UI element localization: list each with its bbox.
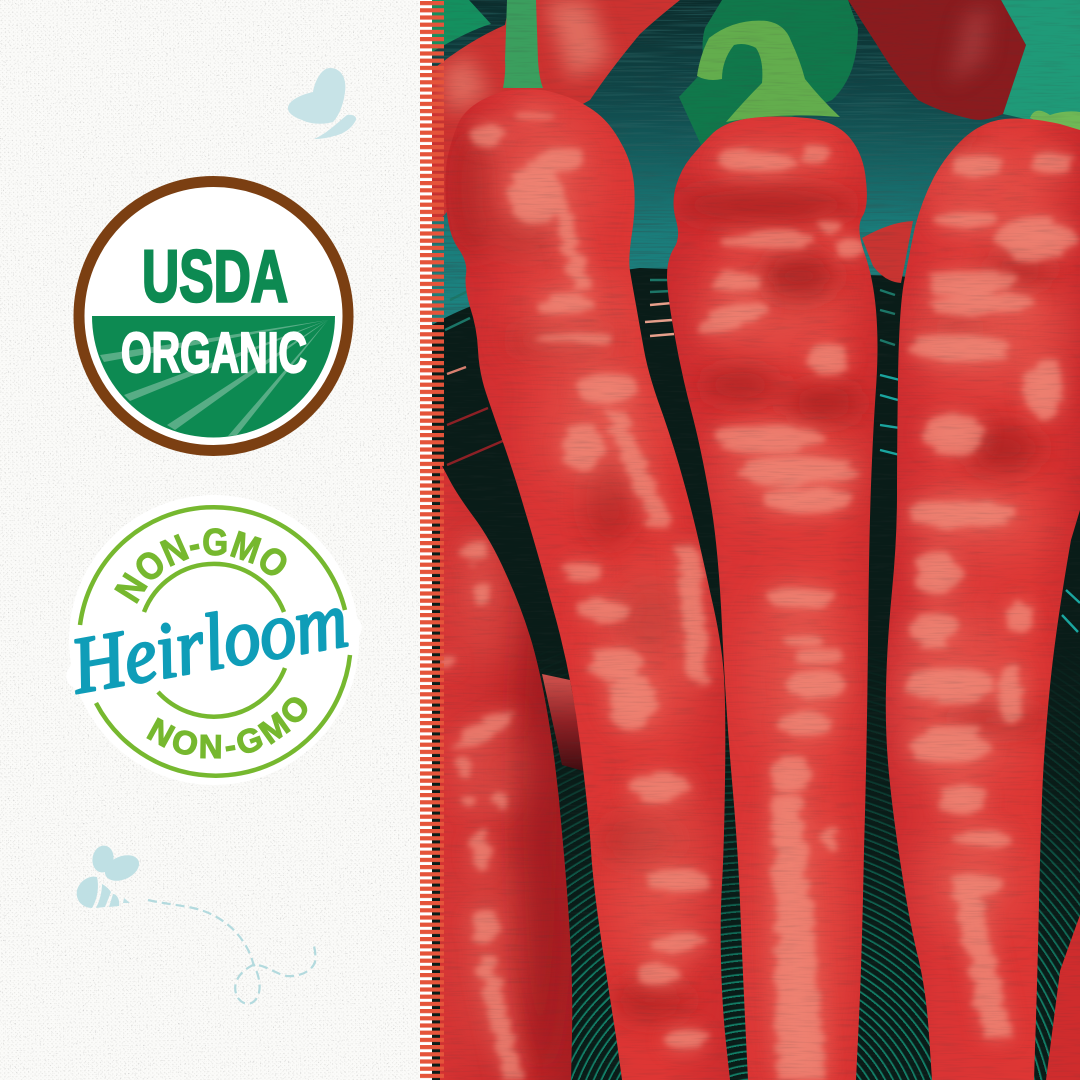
pepper: lower left bbox=[440, 466, 572, 1080]
pepper: right long bbox=[880, 112, 1080, 1080]
pepper: centre long bbox=[660, 112, 885, 1080]
photo background: dark woven basket bbox=[432, 268, 1080, 1080]
stamp white backing bbox=[59, 495, 369, 785]
top-right background pepper bbox=[848, 0, 1028, 122]
seal green field bbox=[88, 316, 338, 441]
icon: USDA organic seal bbox=[79, 182, 348, 450]
seal word: USDA: USDA bbox=[142, 236, 288, 318]
right leaf bbox=[1001, 0, 1080, 132]
small pepper behind, right bbox=[862, 221, 913, 283]
flight trail bbox=[148, 900, 315, 1004]
top-left background pepper bbox=[432, 0, 682, 220]
stem of centre pepper bbox=[697, 21, 840, 122]
photo grain overlay bbox=[432, 0, 1080, 1080]
centre leaf bbox=[679, 0, 858, 145]
icon: butterfly watermark bbox=[288, 68, 356, 139]
pepper: left long bbox=[440, 85, 735, 1080]
background: white linen fabric bbox=[0, 0, 432, 1080]
seal word: ORGANIC: ORGANIC bbox=[121, 321, 307, 385]
icon: bee with dashed flight trail bbox=[77, 844, 315, 1004]
stamp text: bottom NON-GMO: NON-GMO bbox=[146, 697, 308, 759]
photo background: teal wall bbox=[432, 0, 1080, 330]
photo panel: red chili peppers in a basket bbox=[432, 0, 1080, 1080]
stamp script: Heirloom: Heirloom bbox=[64, 576, 354, 711]
icon: Heirloom Non-GMO stamp bbox=[64, 495, 362, 785]
stem of left pepper bbox=[503, 0, 543, 88]
right stem cap bbox=[1030, 111, 1080, 132]
stamp rings bbox=[80, 507, 350, 776]
small pepper behind, lower left bbox=[542, 674, 587, 772]
decorative serrated red strip between fabric and photo bbox=[420, 0, 444, 1080]
left corner leaf bbox=[432, 0, 491, 52]
bee bbox=[77, 844, 143, 908]
seal ring bbox=[79, 182, 348, 450]
bottom-right pepper corner bbox=[1046, 915, 1080, 1080]
stamp text: top NON-GMO: NON-GMO bbox=[114, 528, 287, 604]
